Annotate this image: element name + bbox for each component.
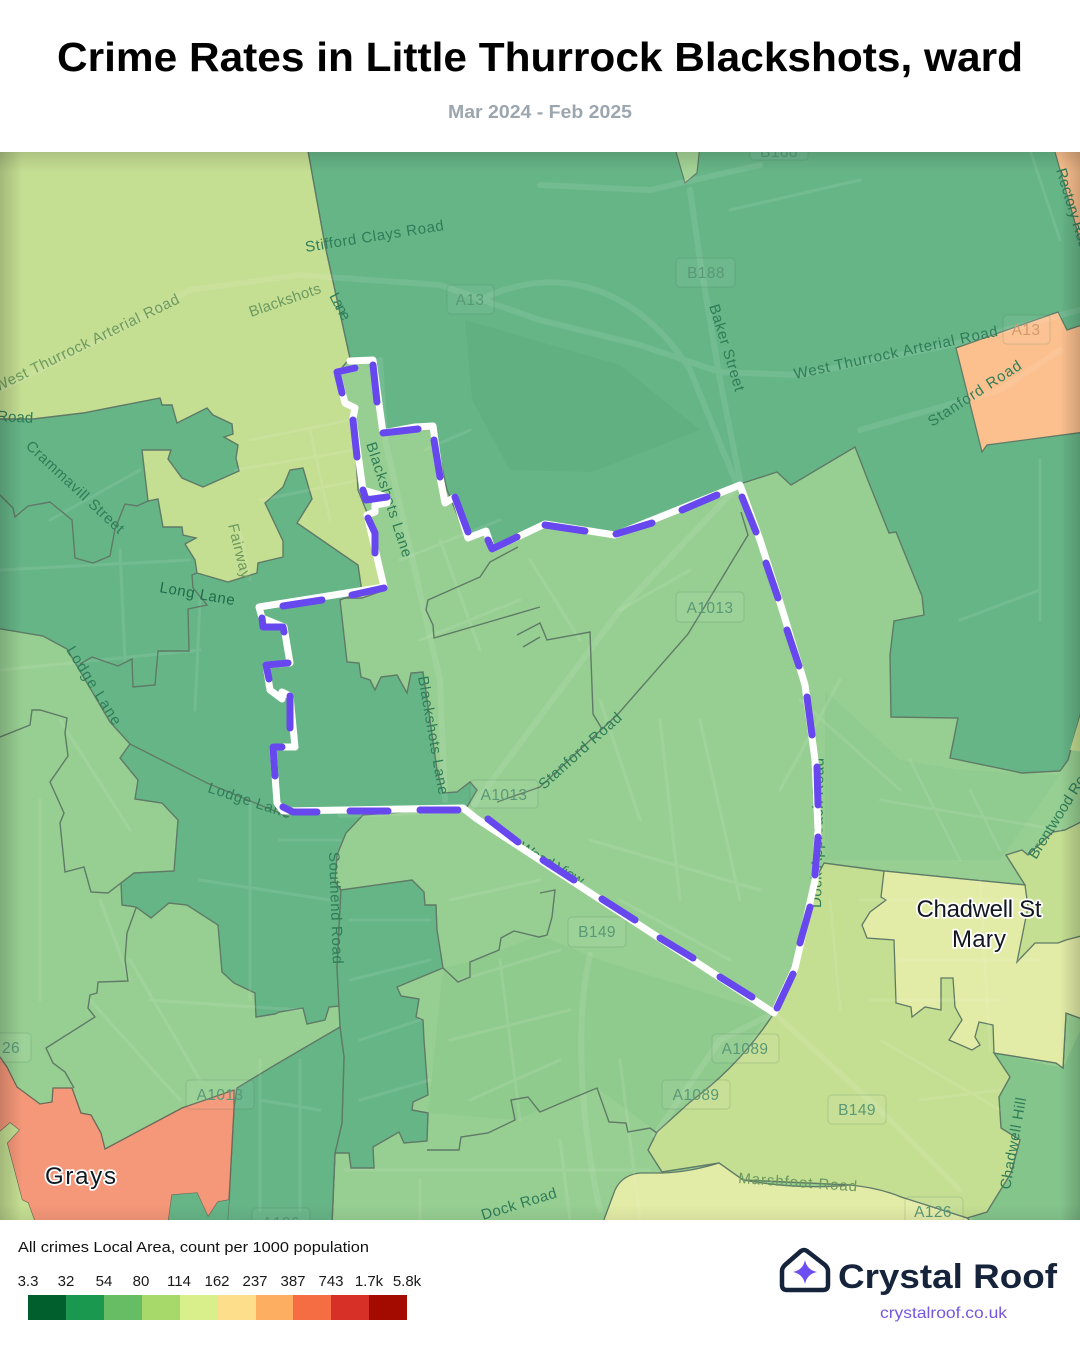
legend: [18, 1239, 422, 1320]
label: Stanford Road centre: Stanford Road: [535, 709, 625, 793]
ward boundary: [259, 360, 818, 1013]
shield: A126 west edge: 26: [2, 1040, 20, 1057]
subtitle: date range: Mar 2024 - Feb 2025: [448, 101, 632, 122]
shield: A126 west edge: [0, 1033, 31, 1062]
region: slightly darker area south of the ward: [428, 935, 770, 1132]
boundary lines between neighbourhoods: [0, 490, 748, 1225]
region: north-east dark green area: [307, 145, 1080, 773]
legend tick labels: 387: [280, 1273, 306, 1290]
road network: [0, 150, 1080, 1220]
label: Blackshots Lane in ward: Blackshots Lane: [362, 440, 415, 559]
region: slightly darker band east of the ward: [825, 690, 1060, 860]
ward outline: white: [259, 360, 818, 1013]
legend tick labels: 1.7k: [355, 1273, 384, 1290]
legend title: All crimes Local Area, count per 1000 population: [18, 1239, 369, 1256]
label: Blackshots Lane south: Blackshots Lane: [414, 675, 452, 796]
legend colour scale: [28, 1295, 407, 1320]
shield: A126 south: [252, 1208, 310, 1220]
shield: A1089 north: A1089: [722, 1041, 768, 1058]
shield: B149 east: [828, 1095, 886, 1124]
region: central dark green area: [335, 880, 443, 1168]
legend tick labels: 237: [242, 1273, 268, 1290]
shield: B149 east: B149: [838, 1102, 876, 1119]
label: Lodge Lane west: Lodge Lane: [63, 643, 125, 728]
label: Marshfoot Road: Marshfoot Road: [738, 1170, 858, 1195]
region: south-west corner light: [0, 1123, 36, 1225]
region: north-west light area: [0, 145, 385, 600]
street name labels: [0, 166, 1080, 1224]
icon: house with star: [782, 1250, 828, 1290]
region: Marshfoot pale band: [602, 1163, 975, 1225]
place label: Grays: Grays: [45, 1163, 116, 1190]
logo: Crystal Roof: [782, 1250, 1058, 1322]
shield: A13 east: [1003, 315, 1050, 344]
label: Fairway: Fairway: [224, 522, 254, 581]
region: Chadwell St Mary pale area: [862, 871, 1080, 1068]
shield: A1013 centre: A1013: [481, 787, 527, 804]
shield: B188 top: [750, 152, 808, 160]
road number shields: [0, 136, 1050, 1237]
region: south dark green area: [227, 1027, 344, 1225]
region: orange corner: [1054, 152, 1080, 242]
shield: A126 south-east: A126: [914, 1204, 952, 1221]
region: blob at top edge: [676, 152, 700, 184]
shield: B149 west: [568, 917, 626, 947]
label: Lodge Lane south: Lodge Lane: [206, 780, 293, 822]
shield: A13 west: [447, 285, 494, 314]
shield: A1089 south: A1089: [673, 1087, 719, 1104]
label: Stanford Road east: Stanford Road: [925, 357, 1025, 430]
region: small dark patch south of Grays: [168, 1193, 229, 1220]
shield: A1013 north: [676, 592, 744, 622]
label: Chadwell Hill: Chadwell Hill: [997, 1096, 1030, 1191]
shield: B188: B188: [687, 265, 725, 282]
region: west dark green area: [0, 398, 477, 1024]
label: Southend Road: Southend Road: [325, 852, 346, 964]
label: Baker Street: Baker Street: [705, 302, 748, 394]
legend tick labels: 162: [204, 1273, 230, 1290]
shield: A1089 north: [712, 1034, 779, 1063]
title: Crime Rates in Little Thurrock Blackshots, ward: [57, 34, 1023, 80]
region: orange east area: [956, 312, 1080, 452]
place labels: [45, 896, 1042, 1190]
map edge shading: [0, 152, 1080, 1220]
legend tick labels: 54: [96, 1273, 112, 1290]
shield: B188: [676, 258, 735, 287]
region: Grays red area: [0, 1050, 234, 1225]
shield: B188 top: B188: [760, 144, 798, 161]
legend tick labels: 3.3: [18, 1273, 38, 1290]
shield: A1013 south-west: [186, 1080, 254, 1109]
shield: A126 south: A126: [262, 1215, 300, 1232]
map base: mid green areas: [0, 362, 1080, 1220]
legend tick labels: 32: [58, 1273, 74, 1290]
shield: A1013 centre: [470, 780, 538, 808]
legend tick labels: 114: [167, 1273, 191, 1290]
label: Dock Road: Dock Road: [479, 1185, 559, 1224]
label: Crammavill Street: Crammavill Street: [22, 437, 128, 538]
place label: Chadwell St Mary: [916, 896, 1042, 953]
label: West Thurrock Arterial Road east: West Thurrock Arterial Road: [792, 323, 999, 383]
legend tick labels: 5.8k: [393, 1273, 422, 1290]
shield: A13 east: A13: [1012, 322, 1040, 339]
wordmark: Crystal Roof: [838, 1258, 1058, 1296]
shield: A1089 south: [662, 1080, 730, 1109]
label: Long Lane: Long Lane: [158, 579, 236, 609]
label: Stifford Clays Road: Stifford Clays Road: [304, 217, 445, 256]
region: south-east corner green: [972, 1032, 1080, 1220]
label: Wood View: Wood View: [516, 839, 587, 890]
shield: A126 south-east: [904, 1196, 964, 1220]
region: light patch at right edge: [1070, 717, 1080, 752]
label: Dock Approach Road: Dock Approach Road: [808, 758, 828, 908]
label: Blackshots: Blackshots: [247, 280, 323, 321]
shield: A13 west: A13: [456, 292, 484, 309]
region: south-east light area: [648, 820, 1080, 1218]
patch: darker fields north of the ward: [465, 320, 700, 472]
legend tick labels: [18, 1273, 422, 1290]
ward outline: purple dashes: [262, 365, 818, 1008]
legend tick labels: 80: [133, 1273, 149, 1290]
website: crystalroof.co.uk: [880, 1305, 1008, 1322]
shield: A1013 south-west: A1013: [197, 1087, 243, 1104]
shield: B149 west: B149: [578, 924, 616, 941]
label: Lane north: Lane: [325, 290, 354, 323]
legend tick labels: 743: [318, 1273, 344, 1290]
shield: A1013 north: A1013: [687, 600, 733, 617]
place label: Chadwell St Mary: Chadwell St: [916, 896, 1042, 923]
place label: Chadwell St Mary: Mary: [952, 926, 1006, 953]
